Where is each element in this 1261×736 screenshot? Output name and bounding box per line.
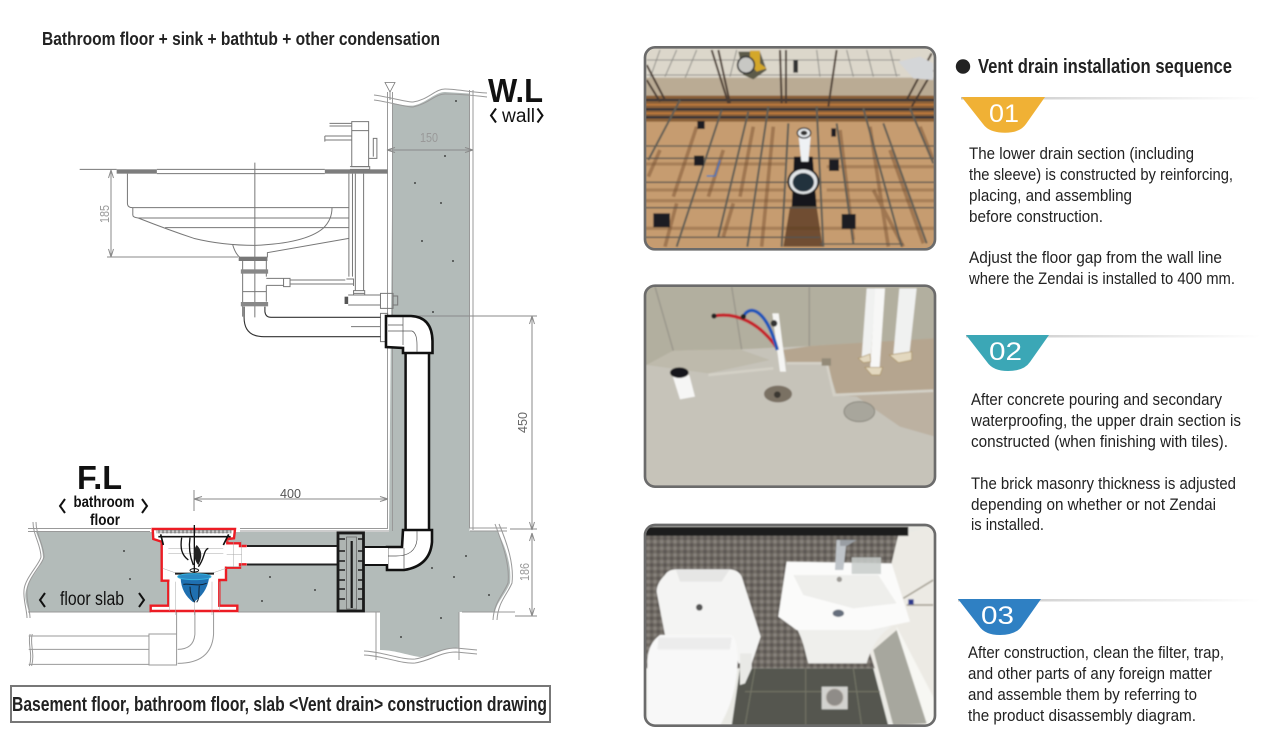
step 2: constructed (when finishing with tiles). [971, 433, 1228, 451]
label: F.L bathroom floor: bathroom [74, 494, 134, 511]
label: floor slab: floor slab [60, 589, 124, 610]
level triangle [385, 82, 395, 100]
wall and slab outlines [24, 89, 515, 663]
badge 01 [962, 97, 1045, 133]
panel: construction drawing [24, 82, 537, 666]
pipe below slab [29, 612, 214, 666]
sink and faucet linework [80, 122, 398, 342]
concrete wall and slab [25, 92, 510, 657]
photo 3: finished bathroom [645, 525, 935, 726]
step 2: depending on whether or not Zendai [971, 496, 1216, 514]
drain interior [157, 525, 242, 615]
step 1: where the Zendai is installed to 400 mm. [968, 270, 1235, 288]
cleanout block [338, 533, 364, 611]
label: W.L wall: wall [501, 106, 535, 127]
step 2: is installed. [971, 516, 1044, 534]
step 2: waterproofing, the upper drain section is [970, 412, 1241, 430]
caption box: Basement floor, bathroom floor, slab <Vent drain> construction drawing [12, 694, 547, 716]
step 1: The lower drain section (including [969, 145, 1194, 163]
horizontal vent pipe [244, 546, 338, 564]
blue trap [181, 578, 209, 602]
badge 01: 01 [989, 100, 1019, 128]
badge 02 [966, 335, 1049, 371]
photo 1: rebar and lower drain [645, 47, 935, 249]
badge 03 [958, 599, 1041, 635]
heading: drawing caption: Bathroom floor + sink + bathtub + other condensation [42, 29, 440, 49]
step 1: Adjust the floor gap from the wall line [969, 249, 1222, 267]
step 1: placing, and assembling [969, 187, 1132, 205]
dimension: 150: 150 [420, 130, 438, 145]
step 2: The brick masonry thickness is adjusted [971, 475, 1236, 493]
dimension: 450: 450 [515, 412, 530, 433]
step 3: and assemble them by referring to [968, 686, 1197, 704]
dimension lines [107, 148, 537, 616]
vent drain cross-section [151, 525, 247, 615]
dimension: 186: 186 [517, 563, 532, 581]
concrete dots [123, 100, 490, 638]
dimension: 400: 400 [280, 486, 301, 501]
step 1: the sleeve) is constructed by reinforcing, [969, 166, 1233, 184]
label: F.L bathroom floor: F.L [77, 459, 122, 496]
step 3 [958, 599, 1261, 725]
photo 2: upper drain on concrete floor [645, 286, 935, 487]
step 3: After construction, clean the filter, trap, [968, 644, 1224, 662]
step 1: before construction. [969, 208, 1103, 226]
red outline [151, 529, 247, 611]
dimension: 185: 185 [97, 205, 112, 223]
step 2 [966, 335, 1261, 534]
label: F.L bathroom floor: floor [90, 512, 120, 529]
badge 03: 03 [981, 602, 1014, 630]
vertical vent pipe with elbows [364, 316, 432, 570]
step 2: After concrete pouring and secondary [971, 391, 1223, 409]
step 3: and other parts of any foreign matter [968, 665, 1212, 683]
label: W.L wall: W.L [488, 72, 543, 109]
label: F.L bathroom floor [60, 459, 147, 529]
caption box [11, 686, 550, 722]
step 3: the product disassembly diagram. [968, 707, 1196, 725]
label: W.L wall [488, 72, 543, 127]
badge 02: 02 [989, 338, 1022, 366]
step 1 [961, 97, 1261, 288]
